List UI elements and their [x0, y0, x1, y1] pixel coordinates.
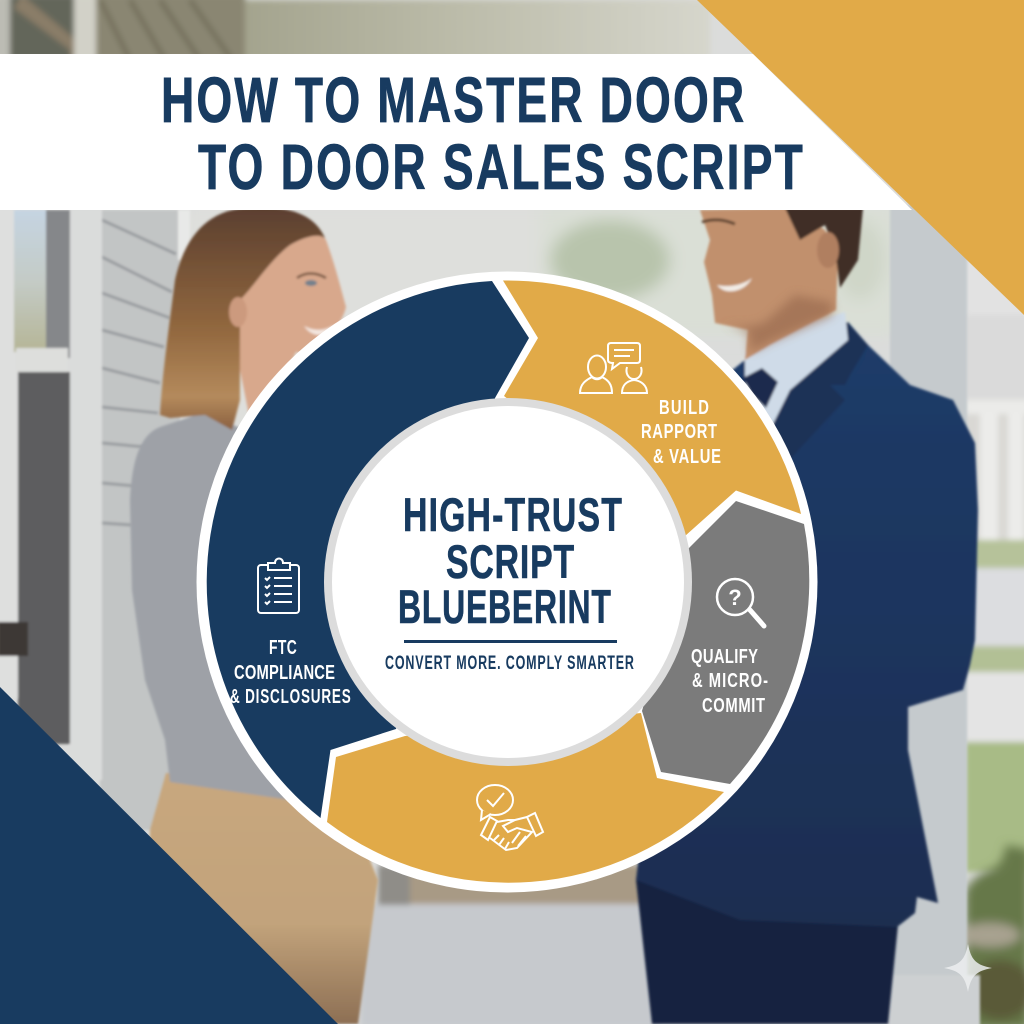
label: FTC compliance: & DISCLOSURES: [230, 684, 351, 708]
label: FTC compliance: FTC: [269, 635, 297, 659]
label: FTC compliance: COMPLIANCE: [234, 661, 335, 684]
segment: close (gold): [327, 713, 724, 883]
gold corner triangle: [697, 0, 1024, 315]
outer white ring: [196, 272, 818, 892]
label: build rapport: & VALUE: [653, 445, 721, 468]
icon: magnifier question: ?: [728, 585, 742, 610]
center title: [398, 489, 622, 634]
center title: HIGH-TRUST: [403, 489, 622, 541]
label: build rapport: [641, 396, 721, 468]
label: qualify: QUALIFY: [691, 645, 758, 668]
icon: clipboard checklist: [258, 558, 299, 613]
cycle diagram: [196, 272, 818, 892]
label: qualify: [691, 645, 768, 717]
title banner: [0, 54, 912, 210]
navy corner triangle: [0, 687, 338, 1024]
segment: build rapport (gold): [503, 280, 801, 536]
icon: people talking: [580, 343, 647, 393]
label: qualify: COMMIT: [702, 694, 765, 717]
label: build rapport: BUILD: [659, 396, 709, 419]
floor: [360, 903, 660, 1024]
segment: FTC compliance (navy): [207, 281, 529, 818]
porch post: [890, 205, 967, 985]
man jaw shadow: [718, 295, 832, 352]
icon: magnifier question: [717, 579, 764, 626]
center subtitle: CONVERT MORE. COMPLY SMARTER: [385, 652, 634, 674]
label: build rapport: RAPPORT: [641, 420, 717, 443]
distant background: [180, 205, 900, 505]
center title: BLUEBERINT: [398, 581, 611, 634]
sparkle icon: [944, 944, 992, 992]
house wall and window: [0, 205, 980, 1024]
title text: TO DOOR SALES SCRIPT: [198, 132, 803, 203]
top ceiling and siding: [0, 0, 710, 60]
divider: [404, 640, 617, 643]
icon: handshake with check bubble: [477, 785, 543, 850]
title text: HOW TO MASTER DOOR: [161, 65, 744, 136]
center title: SCRIPT: [446, 536, 574, 588]
woman figure: [130, 207, 378, 1024]
label: qualify: & MICRO-: [692, 669, 768, 692]
right side houses and lawn: [965, 205, 1024, 315]
man figure: [636, 208, 978, 1024]
segment: qualify (gray): [642, 501, 809, 784]
center circle: [324, 398, 692, 766]
title text: [161, 65, 803, 203]
label: FTC compliance: [230, 635, 351, 708]
